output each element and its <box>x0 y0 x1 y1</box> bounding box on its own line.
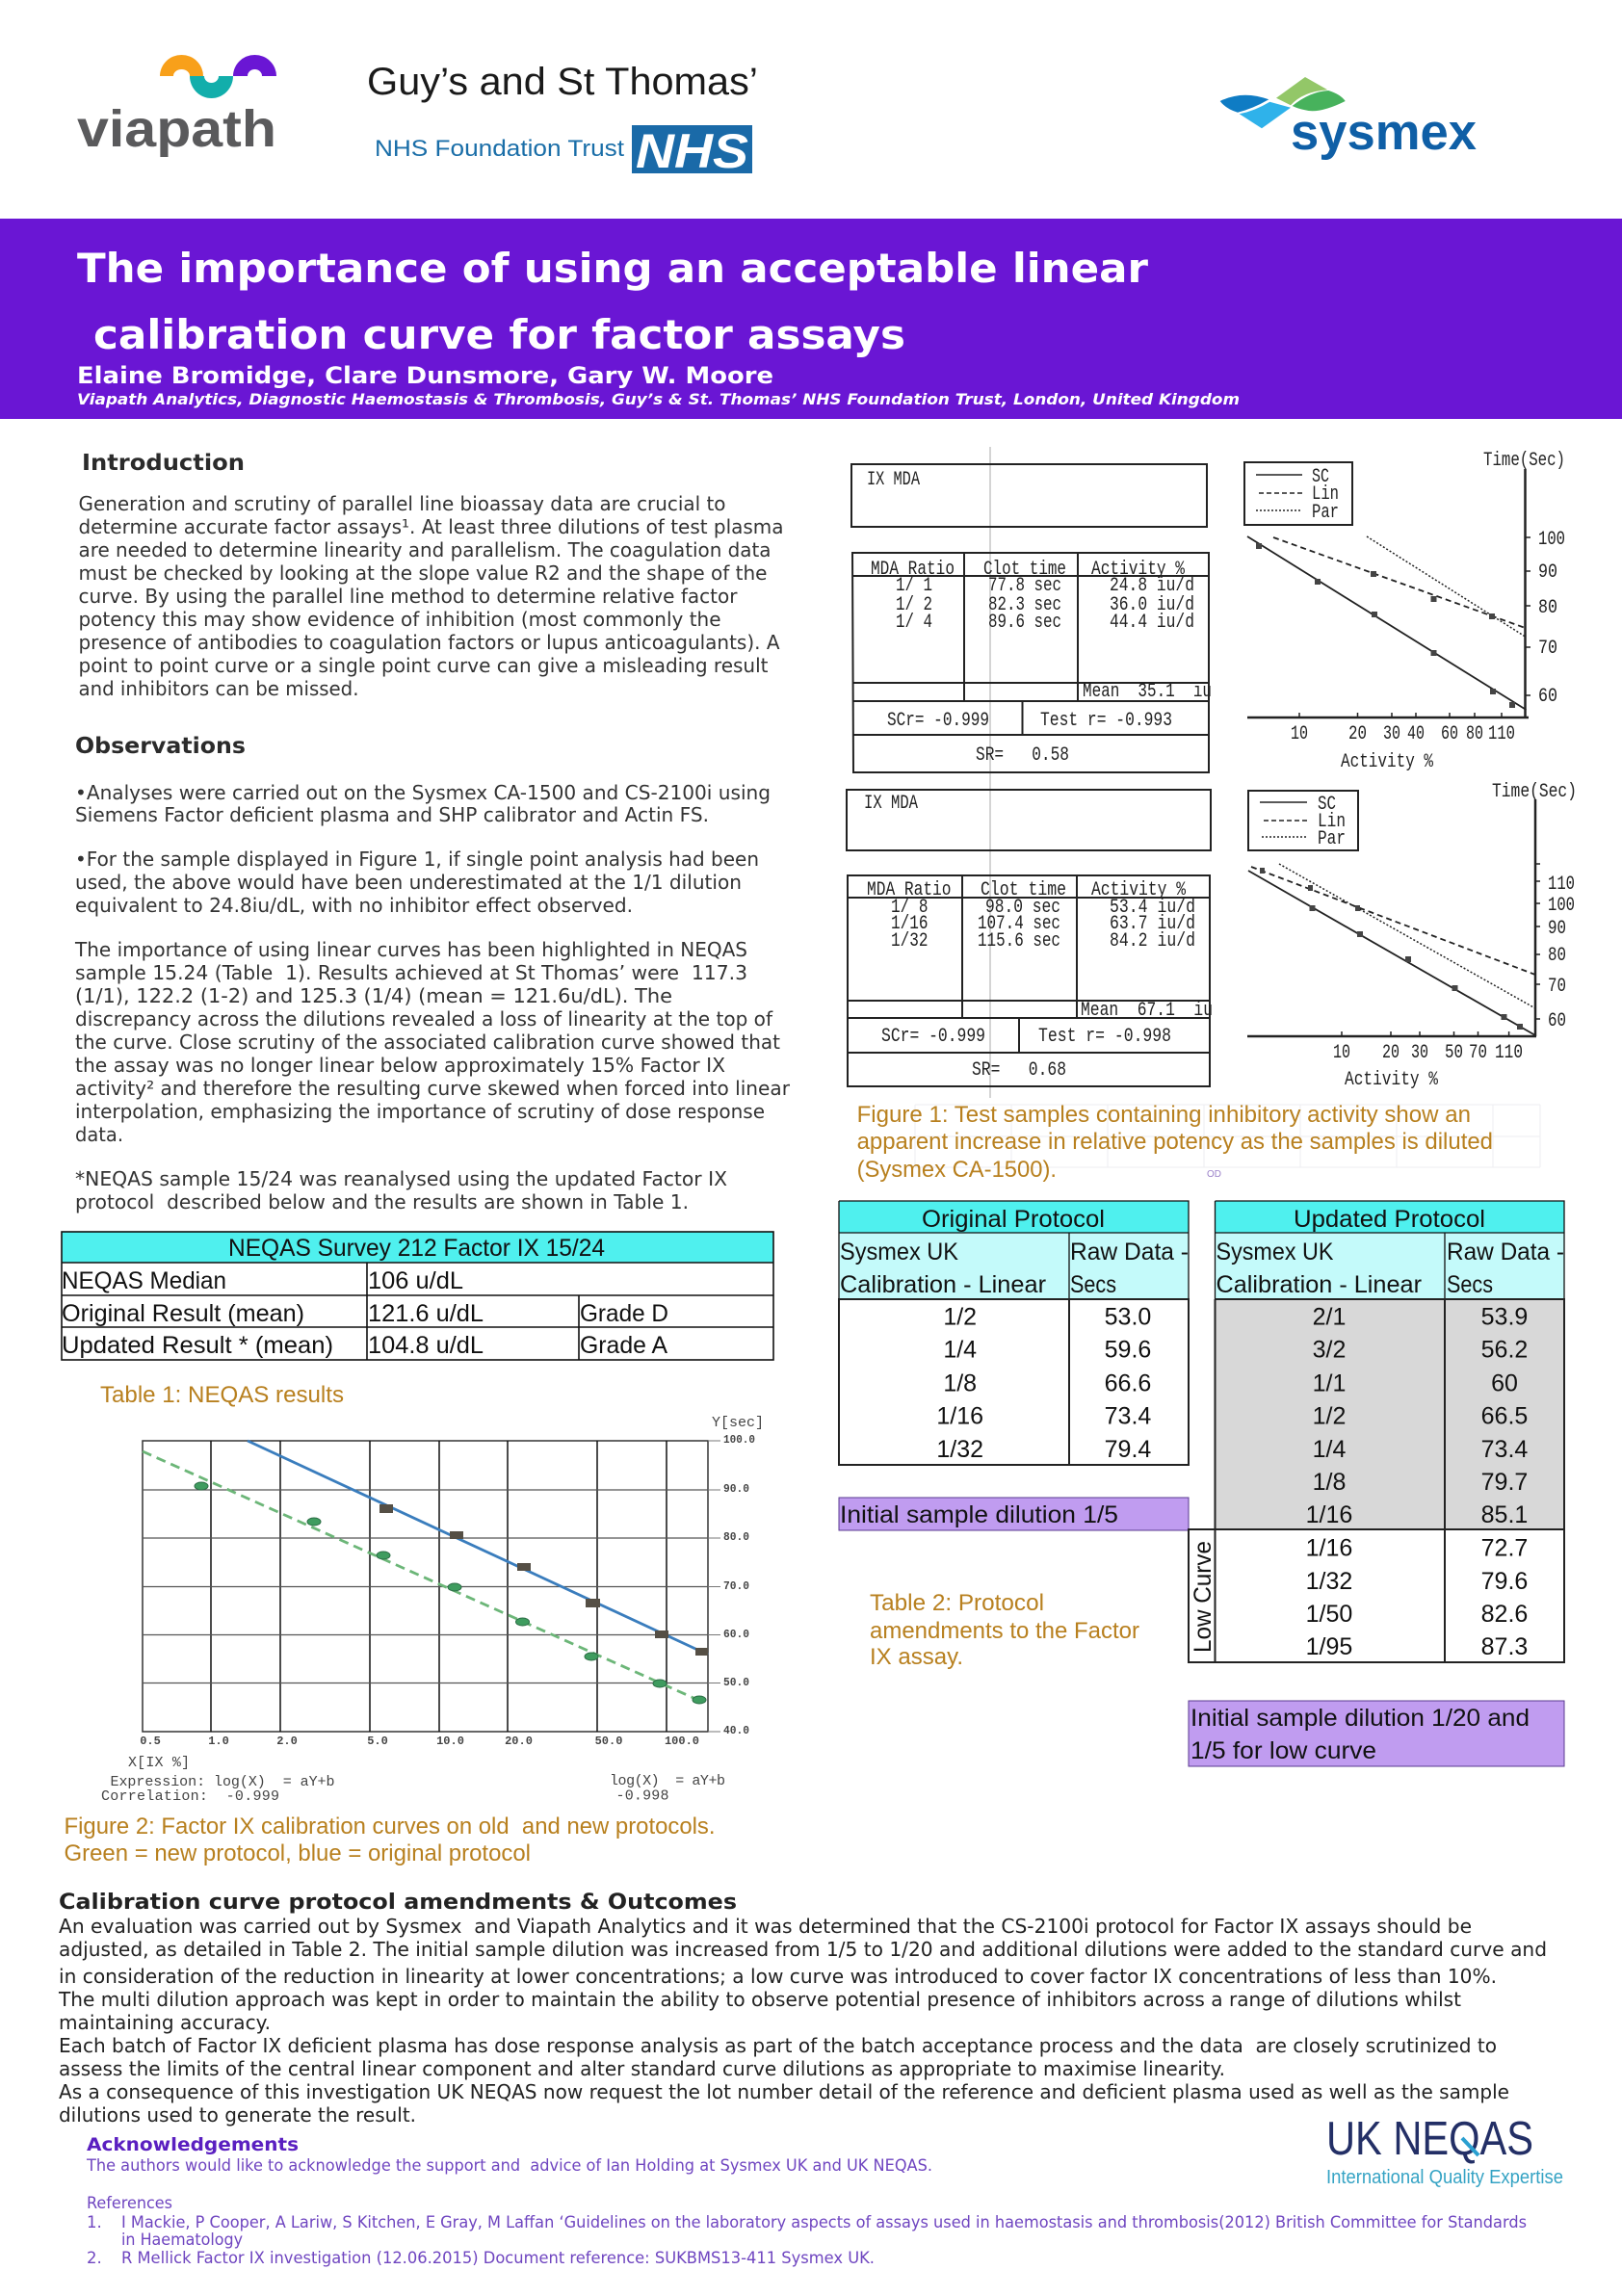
table 1: NEQAS results: 121.6 u/dL <box>368 1300 484 1327</box>
table 2: original protocol: 1/2 <box>943 1303 977 1330</box>
text block: observations: protocol described below and the results are shown in Table 1. <box>75 1190 689 1213</box>
table 2: original protocol: 79.4 <box>1105 1436 1151 1463</box>
note: updated initial dilution <box>1189 1701 1564 1766</box>
chart: lower activity plot: 110 <box>1495 1042 1523 1064</box>
x axis labels: 5.0 <box>367 1735 388 1748</box>
chart: lower activity plot: 30 <box>1411 1042 1428 1064</box>
logo: Guy's and St Thomas' NHS Foundation Trust <box>367 61 758 178</box>
printout: lower sample table: SCr= -0.999 <box>881 1026 985 1048</box>
legend: Lin <box>1318 811 1346 833</box>
text block: outcomes <box>58 1915 1547 2126</box>
printout: upper sample table: 24.8 iu/d <box>1110 575 1194 597</box>
chart: upper activity plot: 110 <box>1488 723 1515 745</box>
text block: observations <box>74 781 791 1213</box>
caption: figure 2: Green = new protocol, blue = original protocol <box>64 1840 531 1866</box>
chart: upper activity plot: 20 <box>1348 723 1367 745</box>
table 1: NEQAS results: NEQAS Median <box>62 1267 226 1294</box>
text block: observations: used, the above would have been underestimated at the 1/1 dilution <box>75 871 742 894</box>
table 2: updated protocol: 1/32 <box>1306 1568 1352 1595</box>
chart: lower activity plot: 70 <box>1469 1042 1487 1064</box>
x axis labels: 100.0 <box>665 1735 699 1748</box>
table 2: updated protocol: 1/16 <box>1306 1535 1352 1562</box>
chart: lower activity plot: 80 <box>1548 945 1566 967</box>
printout: lower sample table: IX MDA <box>864 793 918 815</box>
x axis labels: 0.5 <box>140 1735 161 1748</box>
table 2: original protocol: 1/32 <box>936 1436 983 1463</box>
chart: upper activity plot: Activity % <box>1341 751 1434 773</box>
table 2: updated protocol: 60 <box>1491 1370 1518 1396</box>
y axis labels: 40.0 <box>723 1724 749 1737</box>
table 2: original protocol: 66.6 <box>1105 1370 1151 1396</box>
chart: upper activity plot: 80 <box>1538 597 1557 619</box>
caption: table 2: IX assay. <box>870 1644 963 1670</box>
table 1: NEQAS results: Grade A <box>580 1332 667 1359</box>
logo: Guy's and St Thomas' NHS Foundation Trust: NHS <box>636 124 748 178</box>
printout: upper sample table: 36.0 iu/d <box>1110 594 1194 616</box>
table 2: updated protocol: 1/2 <box>1313 1403 1346 1430</box>
y axis labels: 50.0 <box>723 1676 749 1689</box>
caption: table 2: Table 2: Protocol <box>870 1590 1044 1616</box>
printout: upper sample table <box>851 464 1212 772</box>
caption: table 1: Table 1: NEQAS results <box>100 1382 344 1408</box>
chart: lower activity plot: 110 <box>1548 874 1575 896</box>
table 2: updated protocol: 82.6 <box>1481 1601 1528 1628</box>
text block: observations: •For the sample displayed in Figure 1, if single point analysis had been <box>75 848 759 871</box>
text block: outcomes: maintaining accuracy. <box>59 2011 271 2034</box>
caption: figure 1: (Sysmex CA-1500). <box>857 1157 1057 1183</box>
regression details <box>101 1755 725 1805</box>
text block: observations: *NEQAS sample 15/24 was reanalysed using the updated Factor IX <box>75 1167 727 1190</box>
printout: lower sample table: SR= 0.68 <box>972 1059 1066 1082</box>
heading: Observations: Observations <box>75 734 246 759</box>
x axis labels: 2.0 <box>276 1735 298 1748</box>
logo: UK NEQAS <box>1326 2113 1563 2188</box>
printout: upper sample table: SR= 0.58 <box>976 744 1069 767</box>
chart: upper activity plot: 40 <box>1407 723 1425 745</box>
text block: references: I Mackie, P Cooper, A Lariw, S Kitchen, E Gray, M Laffan ‘Guidelines on the laboratory aspects of assays used in haemostasis and thrombosis(2012) British Committee for Standards <box>121 2213 1527 2231</box>
table 2: original protocol <box>839 1201 1189 1465</box>
scan fold line <box>989 447 991 1098</box>
printout: upper sample table: 1/ 4 <box>896 612 932 634</box>
printout: upper sample table: 44.4 iu/d <box>1110 612 1194 634</box>
regression details: Expression: log(X) = aY+b <box>110 1774 335 1790</box>
text block: references: R Mellick Factor IX investigation (12.06.2015) Document reference: SUKBMS13-411 Sysmex UK. <box>121 2249 875 2267</box>
heading: calibration curve protocol amendments: Calibration curve protocol amendments & Outcomes <box>59 1891 737 1915</box>
printout: lower sample table: 98.0 sec <box>985 897 1060 919</box>
note: updated initial dilution: 1/5 for low curve <box>1190 1737 1376 1764</box>
caption: table 2 <box>870 1590 1139 1670</box>
table 2: original protocol: 1/8 <box>943 1370 977 1396</box>
text block: references: References <box>87 2194 172 2212</box>
table 2: updated protocol: Raw Data - <box>1447 1239 1564 1265</box>
table 2: original protocol: 1/16 <box>936 1403 983 1430</box>
legend: Lin <box>1312 483 1339 506</box>
printout: lower sample table: 1/32 <box>891 930 929 952</box>
table 2: updated protocol: 72.7 <box>1481 1535 1528 1562</box>
printout: upper sample table: Clot time <box>983 559 1066 581</box>
printout: upper sample table: 1/ 1 <box>896 575 932 597</box>
heading: acknowledgements: Acknowledgements <box>87 2134 299 2155</box>
legend: Par <box>1318 828 1346 850</box>
printout: lower sample table: Activity % <box>1091 879 1187 901</box>
text block: outcomes: An evaluation was carried out by Sysmex and Viapath Analytics and it was determined that the CS-2100i protocol for Factor IX assays should be <box>59 1915 1472 1938</box>
table 1: NEQAS results: NEQAS Survey 212 Factor IX 15/24 <box>228 1235 605 1262</box>
logo: viapath <box>77 55 276 158</box>
printout: lower sample table: 53.4 iu/d <box>1110 897 1195 919</box>
text block: observations: data. <box>75 1123 123 1146</box>
chart: lower activity plot: 50 <box>1445 1042 1463 1064</box>
text block: observations: activity² and therefore the resulting curve skewed when forced into linear <box>75 1077 791 1100</box>
printout: upper sample table: Activity % <box>1091 559 1186 581</box>
text block: observations: •Analyses were carried out on the Sysmex CA-1500 and CS-2100i using <box>75 781 771 804</box>
chart: upper activity plot: 60 <box>1538 686 1557 708</box>
printout: upper sample table: 82.3 sec <box>988 594 1061 616</box>
chart: upper activity plot: 60 <box>1441 723 1458 745</box>
line: new protocol <box>143 1451 706 1704</box>
regression details: -0.998 <box>616 1787 668 1805</box>
printout: lower sample table: 1/ 8 <box>891 897 929 919</box>
text block: observations: The importance of using linear curves has been highlighted in NEQAS <box>74 938 747 961</box>
caption: figure 1: apparent increase in relative potency as the samples is diluted <box>857 1129 1493 1155</box>
text block: observations: (1/1), 122.2 (1-2) and 125.3 (1/4) (mean = 121.6u/dL). The <box>75 984 672 1007</box>
regression details: X[IX %] <box>128 1755 190 1771</box>
x axis labels: 1.0 <box>208 1735 229 1748</box>
text block: introduction: are needed to determine linearity and parallelism. The coagulation data <box>79 538 771 561</box>
legend: SC <box>1312 466 1329 488</box>
table 2: updated protocol: 1/16 <box>1306 1501 1352 1528</box>
table 2: updated protocol: 66.5 <box>1481 1403 1528 1430</box>
authors: Elaine Bromidge, Clare Dunsmore, Gary W. Moore <box>77 362 773 389</box>
heading: Introduction: Introduction <box>82 451 245 476</box>
logo: Guy's and St Thomas' NHS Foundation Trust: NHS Foundation Trust <box>375 136 624 162</box>
legend <box>1248 791 1358 850</box>
table 2: original protocol: 73.4 <box>1105 1403 1151 1430</box>
x axis labels <box>140 1735 699 1748</box>
table 2: updated protocol: 53.9 <box>1481 1303 1528 1330</box>
table 2: updated protocol: 79.7 <box>1481 1469 1528 1496</box>
stray chart mark: OD <box>1207 1169 1221 1180</box>
line: original protocol <box>248 1441 708 1656</box>
printout: lower sample table: Test r= -0.998 <box>1038 1026 1171 1048</box>
chart: lower activity plot <box>1247 781 1577 1091</box>
table 2: updated protocol: 85.1 <box>1481 1501 1528 1528</box>
chart: lower activity plot: 60 <box>1548 1010 1566 1032</box>
table 2: original protocol: Secs <box>1070 1271 1116 1298</box>
text block: references: 2. <box>87 2249 102 2267</box>
printout: lower sample table: 63.7 iu/d <box>1110 913 1195 935</box>
table 2: updated protocol: 73.4 <box>1481 1436 1528 1463</box>
chart: upper activity plot <box>1244 450 1565 773</box>
printout: lower sample table: 115.6 sec <box>978 930 1060 952</box>
chart: lower activity plot: 100 <box>1548 895 1575 917</box>
text block: observations: discrepancy across the dilutions revealed a loss of linearity at the top of <box>75 1007 773 1031</box>
table 2: updated protocol: 79.6 <box>1481 1568 1528 1595</box>
chart: upper activity plot: 30 <box>1383 723 1400 745</box>
y axis labels: 90.0 <box>723 1482 749 1496</box>
text block: introduction: must be checked by looking at the slope value R2 and the shape of the <box>79 561 767 585</box>
table 2: original protocol: Original Protocol <box>922 1206 1105 1233</box>
faint grid behind figure 1 caption <box>915 1105 1540 1167</box>
note: updated initial dilution: Initial sample dilution 1/20 and <box>1190 1705 1530 1732</box>
printout: lower sample table: Mean 67.1 iu <box>1081 1000 1213 1022</box>
printout: lower sample table: MDA Ratio <box>867 879 952 901</box>
note: original initial dilution: Initial sample dilution 1/5 <box>840 1501 1118 1528</box>
table 2: updated protocol: 3/2 <box>1313 1337 1346 1364</box>
table 2: updated protocol: Sysmex UK <box>1216 1239 1334 1265</box>
logo: sysmex: sysmex <box>1291 104 1478 161</box>
text block: outcomes: in consideration of the reduction in linearity at lower concentrations; a low curve was introduced to cover factor IX concentrations of less than 10%. <box>59 1965 1497 1988</box>
table 1: NEQAS results: Grade D <box>580 1300 668 1327</box>
chart: upper activity plot: 100 <box>1538 529 1565 551</box>
caption: figure 2: Figure 2: Factor IX calibration curves on old and new protocols. <box>64 1813 715 1839</box>
printout: upper sample table: 77.8 sec <box>988 575 1061 597</box>
table 1: NEQAS results: Updated Result * (mean) <box>62 1332 333 1359</box>
text block: introduction: point to point curve or a single point curve can give a misleading result <box>79 654 769 677</box>
text block: references: 1. <box>87 2213 102 2231</box>
regression details: Correlation: -0.999 <box>101 1788 279 1805</box>
chart: lower activity plot: 70 <box>1548 976 1566 998</box>
text block: outcomes: adjusted, as detailed in Table 2. The initial sample dilution was increased from 1/5 to 1/20 and additional dilutions were added to the standard curve and <box>59 1938 1547 1961</box>
chart: lower activity plot: 20 <box>1382 1042 1400 1064</box>
logo: UK NEQAS: International Quality Expertise <box>1326 2167 1563 2188</box>
table 2: original protocol: Raw Data - <box>1070 1239 1189 1265</box>
table 2: original protocol: 1/4 <box>943 1337 977 1364</box>
y axis labels <box>712 1415 764 1737</box>
printout: upper sample table: Test r= -0.993 <box>1040 710 1172 732</box>
title: The importance of using an acceptable linear <box>77 245 1148 292</box>
printout: lower sample table: Clot time <box>981 879 1066 901</box>
text block: observations: interpolation, emphasizing the importance of scrutiny of dose response <box>75 1100 765 1123</box>
table 2: updated protocol: 56.2 <box>1481 1337 1528 1364</box>
y axis labels: 60.0 <box>723 1628 749 1641</box>
table 1: NEQAS results <box>62 1232 773 1360</box>
printout: lower sample table: 107.4 sec <box>978 913 1060 935</box>
table 2: updated protocol: 1/95 <box>1306 1633 1352 1660</box>
table 1: NEQAS results: 104.8 u/dL <box>368 1332 484 1359</box>
text block: introduction: potency this may show evidence of inhibition (most commonly the <box>79 608 720 631</box>
text block: introduction <box>79 492 784 700</box>
table 2: updated protocol: Updated Protocol <box>1294 1206 1485 1233</box>
affiliation: Viapath Analytics, Diagnostic Haemostasis & Thrombosis, Guy’s & St. Thomas’ NHS Foundation Trust, London, United Kingdom <box>77 390 1240 408</box>
table 2: original protocol: 53.0 <box>1105 1303 1151 1330</box>
text block: introduction: presence of antibodies to coagulation factors or lupus anticoagulants). A <box>79 631 780 654</box>
y axis labels: 80.0 <box>723 1530 749 1544</box>
caption: table 2: amendments to the Factor <box>870 1618 1139 1644</box>
text block: outcomes: Each batch of Factor IX deficient plasma has dose response analysis as part of the batch acceptance process and the data are closely scrutinized to <box>59 2034 1497 2057</box>
x axis labels: 20.0 <box>505 1735 533 1748</box>
table 2: updated protocol: 1/1 <box>1313 1370 1346 1396</box>
table 2: updated protocol: 87.3 <box>1481 1633 1528 1660</box>
text block: references: in Haematology <box>121 2231 243 2249</box>
table 2: updated protocol <box>1189 1201 1564 1662</box>
text block: observations: equivalent to 24.8iu/dL, with no inhibitor effect observed. <box>75 894 633 917</box>
logo: viapath: viapath <box>77 100 276 158</box>
chart: upper activity plot: 90 <box>1538 561 1557 584</box>
regression details: log(X) = aY+b <box>610 1773 725 1789</box>
table 2: updated protocol: 1/50 <box>1306 1601 1352 1628</box>
text block: observations: the assay was no longer linear below approximately 15% Factor IX <box>75 1054 725 1077</box>
chart: upper activity plot: 70 <box>1538 638 1557 660</box>
printout: lower sample table: 84.2 iu/d <box>1110 930 1195 952</box>
printout: upper sample table: IX MDA <box>867 469 920 491</box>
printout: lower sample table <box>847 790 1213 1086</box>
y axis labels: Y[sec] <box>712 1415 764 1431</box>
legend: SC <box>1318 794 1336 816</box>
printout: upper sample table: 1/ 2 <box>896 594 932 616</box>
x axis labels: 50.0 <box>595 1735 622 1748</box>
text block: observations: Siemens Factor deficient plasma and SHP calibrator and Actin FS. <box>75 803 709 826</box>
y axis labels: 70.0 <box>723 1579 749 1593</box>
text block: introduction: curve. By using the parallel line method to determine relative factor <box>79 585 738 608</box>
chart: upper activity plot: 80 <box>1466 723 1483 745</box>
text block: acknowledgements: The authors would like to acknowledge the support and advice of Ian Holding at Sysmex UK and UK NEQAS. <box>86 2156 932 2175</box>
chart: upper activity plot: Time(Sec) <box>1483 450 1565 472</box>
caption: figure 1: Figure 1: Test samples containing inhibitory activity show an <box>857 1102 1471 1128</box>
caption: figure 1 <box>857 1102 1493 1183</box>
table 2: original protocol: Calibration - Linear <box>840 1271 1046 1298</box>
title banner <box>0 219 1622 419</box>
table 1: NEQAS results: 106 u/dL <box>368 1267 463 1294</box>
text block: outcomes: As a consequence of this investigation UK NEQAS now request the lot number detail of the reference and deficient plasma used as well as the sample <box>59 2080 1509 2103</box>
table 1: NEQAS results: Original Result (mean) <box>62 1300 304 1327</box>
chart: lower activity plot: 10 <box>1333 1042 1350 1064</box>
legend: Par <box>1312 502 1339 524</box>
title <box>77 245 1148 358</box>
logo: Guy's and St Thomas' NHS Foundation Trust: Guy’s and St Thomas’ <box>367 61 758 103</box>
printout: upper sample table: Mean 35.1 iu <box>1083 681 1212 703</box>
table 2: updated protocol: Calibration - Linear <box>1216 1271 1422 1298</box>
legend <box>1244 462 1352 525</box>
table 2: original protocol: 59.6 <box>1105 1337 1151 1364</box>
chart: upper activity plot: 10 <box>1291 723 1308 745</box>
text block: observations: the curve. Close scrutiny of the associated calibration curve showed that <box>75 1031 780 1054</box>
text block: outcomes: assess the limits of the central linear component and alter standard curve dilutions as appropriate to maximise linearity. <box>59 2057 1225 2080</box>
logo: UK NEQAS: UK NEQAS <box>1326 2113 1533 2165</box>
caption: figure 2 <box>64 1813 715 1866</box>
low curve label: Low Curve <box>1190 1541 1216 1653</box>
chart: lower activity plot: Time(Sec) <box>1492 781 1577 803</box>
text block: references <box>87 2194 1527 2267</box>
table 2: original protocol: Sysmex UK <box>840 1239 958 1265</box>
chart: lower activity plot: 90 <box>1548 918 1566 940</box>
y axis labels: 100.0 <box>723 1433 755 1447</box>
x axis labels: 10.0 <box>436 1735 464 1748</box>
table 2: updated protocol: 1/8 <box>1313 1469 1346 1496</box>
text block: introduction: and inhibitors can be missed. <box>79 677 358 700</box>
printout: lower sample table: 1/16 <box>891 913 929 935</box>
table 2: updated protocol: 2/1 <box>1313 1303 1346 1330</box>
chart: figure 2 calibration curves <box>101 1415 764 1805</box>
printout: upper sample table: MDA Ratio <box>871 559 955 581</box>
title: calibration curve for factor assays <box>93 311 905 358</box>
text block: observations: sample 15.24 (Table 1). Results achieved at St Thomas’ were 117.3 <box>75 961 747 984</box>
text block: introduction: determine accurate factor assays¹. At least three dilutions of test plasma <box>79 515 784 538</box>
logo: sysmex <box>1220 77 1478 161</box>
chart: lower activity plot: Activity % <box>1345 1069 1439 1091</box>
printout: upper sample table: SCr= -0.999 <box>887 710 989 732</box>
printout: upper sample table: 89.6 sec <box>988 612 1061 634</box>
table 2: updated protocol: Secs <box>1447 1271 1493 1298</box>
table 2: updated protocol: 1/4 <box>1313 1436 1346 1463</box>
text block: outcomes: dilutions used to generate the result. <box>59 2103 416 2126</box>
text block: introduction: Generation and scrutiny of parallel line bioassay data are crucial to <box>79 492 726 515</box>
text block: outcomes: The multi dilution approach was kept in order to maintain the ability to observe potential presence of inhibitors across a range of dilutions whilst <box>58 1988 1461 2011</box>
note: original initial dilution <box>839 1498 1189 1530</box>
